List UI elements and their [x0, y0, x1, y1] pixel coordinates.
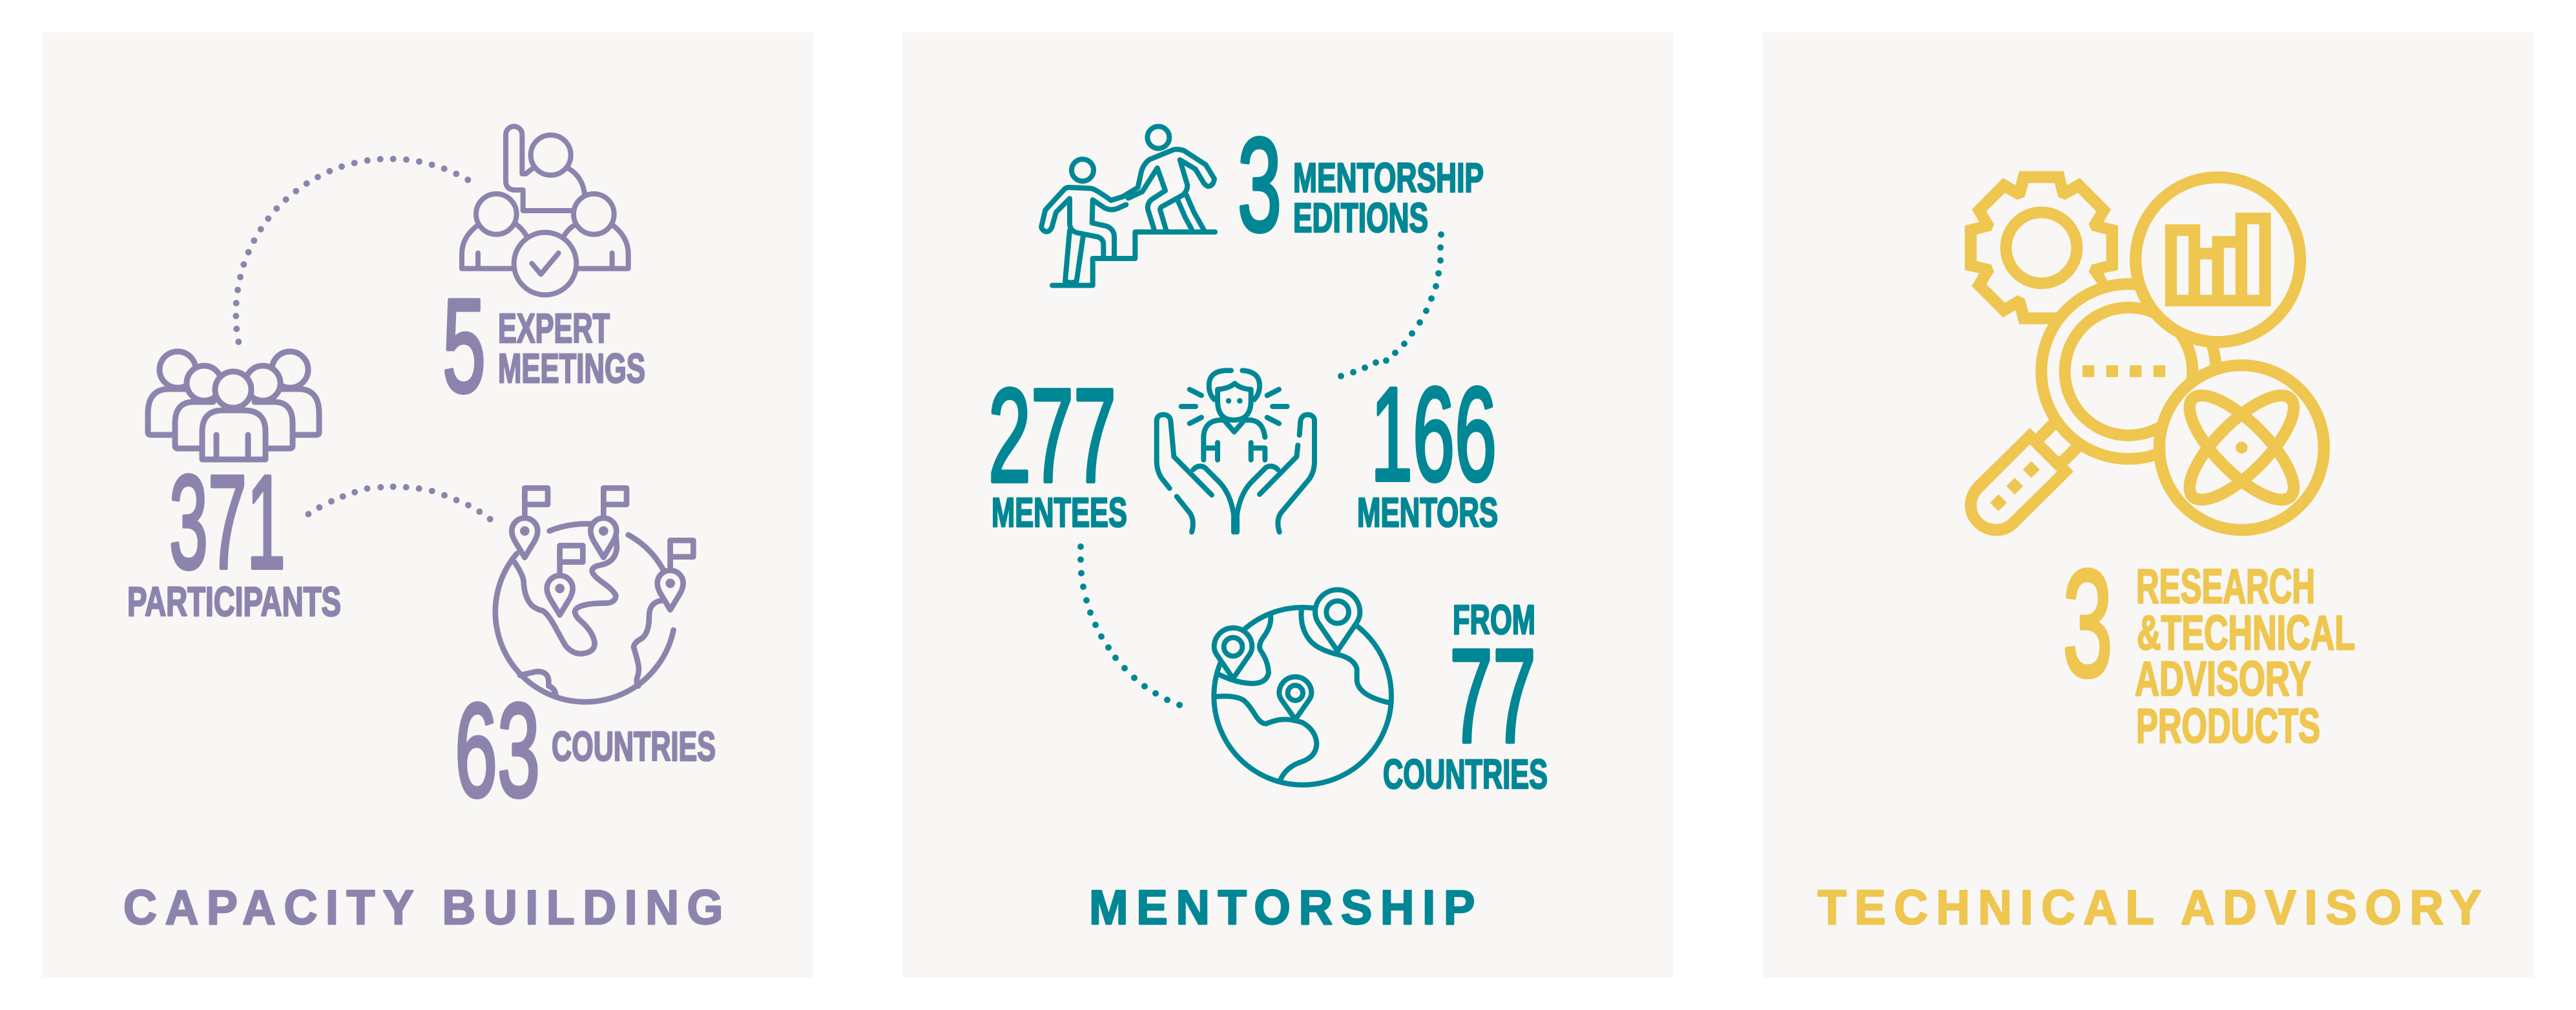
stat: from 77 countries: FROM — [1453, 596, 1535, 643]
stat: 3 research and technical advisory products: RESEARCH — [2136, 559, 2315, 613]
stat: 5 expert meetings: EXPERT — [498, 305, 610, 352]
stat: 371 participants — [127, 448, 341, 625]
stat: 5 expert meetings: MEETINGS — [498, 345, 645, 392]
heading: technical advisory: TECHNICAL ADVISORY — [1818, 880, 2489, 934]
stat: 5 expert meetings — [442, 271, 645, 420]
stat: 3 mentorship editions — [1238, 110, 1484, 259]
dotted connector: participants to expert meetings — [236, 159, 468, 342]
icon: group of participants — [148, 352, 319, 459]
icon: hands holding a person — [1157, 370, 1314, 532]
stat: 5 expert meetings: 5 — [442, 271, 486, 420]
stat: 3 mentorship editions: EDITIONS — [1293, 195, 1428, 241]
heading: capacity building: CAPACITY BUILDING — [123, 880, 731, 934]
stat: 63 countries — [455, 676, 716, 825]
dotted connector: participants to countries — [308, 487, 490, 519]
stat: from 77 countries — [1383, 596, 1548, 797]
dotted connector: mentees to globe — [1081, 547, 1179, 705]
stat: 166 mentors — [1357, 360, 1498, 536]
stat: 166 mentors: MENTORS — [1357, 489, 1498, 536]
icon: globe with flags — [495, 488, 693, 702]
stat: 166 mentors: 166 — [1371, 360, 1497, 509]
stat: 277 mentees: MENTEES — [992, 489, 1127, 536]
icon: mentor helping mentee up stairs — [1041, 127, 1215, 286]
stat: 371 participants: PARTICIPANTS — [127, 578, 341, 625]
dotted connector: editions to mentors — [1341, 235, 1441, 376]
stat: 3 mentorship editions: 3 — [1238, 110, 1282, 259]
stat: from 77 countries: COUNTRIES — [1383, 751, 1548, 797]
stat: from 77 countries: 77 — [1449, 622, 1536, 770]
stat: 63 countries: COUNTRIES — [552, 723, 716, 770]
heading: mentorship: MENTORSHIP — [1089, 880, 1483, 934]
stat: 3 mentorship editions: MENTORSHIP — [1293, 154, 1484, 201]
stat: 3 research and technical advisory products: ADVISORY — [2135, 651, 2311, 706]
stat: 63 countries: 63 — [455, 676, 540, 825]
stat: 3 research and technical advisory products: &TECHNICAL — [2137, 605, 2355, 660]
stat: 3 research and technical advisory products: PRODUCTS — [2136, 699, 2320, 753]
stat: 277 mentees — [988, 361, 1127, 536]
stat: 3 research and technical advisory products — [2062, 538, 2355, 753]
panel: technical advisory — [1763, 32, 2534, 978]
stat: 3 research and technical advisory products: 3 — [2062, 538, 2113, 709]
panel: capacity building — [42, 32, 813, 978]
panel: mentorship — [902, 32, 1673, 978]
icon: gears, chart, atom under magnifier — [1965, 171, 2324, 536]
icon: globe with map pins — [1214, 590, 1391, 785]
icon: expert meeting — [462, 127, 628, 295]
stat: 371 participants: 371 — [169, 448, 286, 596]
stat: 277 mentees: 277 — [988, 361, 1116, 510]
